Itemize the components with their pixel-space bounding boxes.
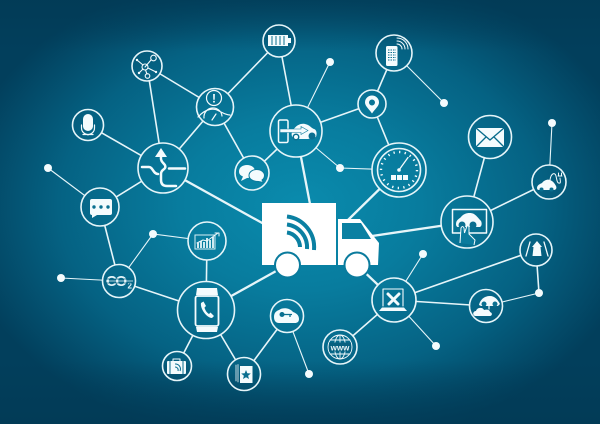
node: electric car [532, 165, 566, 199]
node: touchscreen car [441, 196, 493, 248]
node: www globe [323, 330, 357, 364]
junction dots [44, 58, 556, 378]
node: www globe: www [330, 344, 350, 352]
node: microphone [72, 110, 104, 140]
cab window [342, 223, 371, 239]
node: QR phone with signal [376, 35, 412, 71]
connecting lines [48, 41, 552, 374]
node: chat box [81, 188, 119, 226]
node: location pin [358, 90, 386, 118]
node: star book [228, 358, 260, 390]
node: cloud car [470, 290, 502, 322]
node: road arrow [520, 234, 552, 266]
node: growth chart [188, 222, 226, 260]
node: CO2: CO [106, 273, 127, 290]
node: laptop tools [372, 278, 416, 322]
node: warning gauge: ! [212, 92, 216, 106]
truck cargo box [262, 203, 336, 265]
node: CO2: 2 [128, 282, 132, 290]
node: car key [270, 300, 304, 332]
wifi symbol [287, 216, 314, 250]
front wheel [344, 252, 370, 278]
node: CO2 [102, 264, 136, 298]
node: battery [263, 25, 295, 57]
node: phone and car [270, 105, 322, 157]
node: smartwatch [178, 282, 234, 338]
node: suitcase [162, 352, 192, 380]
node: speedometer [372, 143, 426, 197]
truck [262, 203, 379, 278]
node: envelope [468, 116, 512, 158]
node: network [132, 51, 162, 81]
node: route arrow [138, 143, 188, 193]
truck cab [338, 219, 379, 265]
node: warning gauge [196, 88, 234, 126]
rear wheel [275, 252, 300, 278]
node: speech bubbles [235, 156, 269, 190]
